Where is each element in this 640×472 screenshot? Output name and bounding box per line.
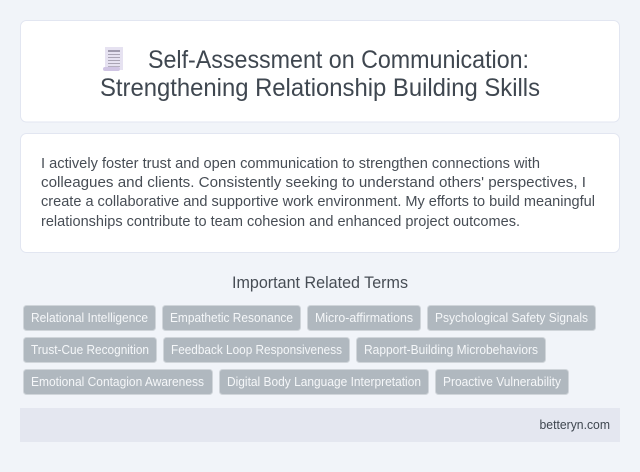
tag: Rapport-Building Microbehaviors <box>356 338 546 362</box>
summary paragraph: I actively foster trust and open communication to strengthen connections with <box>41 156 540 172</box>
footer site name: betteryn.com <box>540 418 610 432</box>
tag: Proactive Vulnerability: Proactive Vulnerability <box>443 375 562 389</box>
tag: Relational Intelligence: Relational Intelligence <box>31 311 148 325</box>
tag: Rapport-Building Microbehaviors: Rapport-Building Microbehaviors <box>364 343 538 357</box>
title <box>100 46 540 102</box>
panel: title card <box>20 20 620 122</box>
tag: Feedback Loop Responsiveness: Feedback Loop Responsiveness <box>171 343 342 357</box>
tag: Empathetic Resonance: Empathetic Resonance <box>170 311 293 325</box>
tag: Psychological Safety Signals <box>428 306 596 330</box>
tag: Empathetic Resonance <box>162 306 300 330</box>
tag: Micro-affirmations: Micro-affirmations <box>315 311 413 325</box>
title: Self-Assessment on Communication: <box>148 46 529 74</box>
panel: summary text <box>20 134 620 252</box>
tag: Digital Body Language Interpretation: Digital Body Language Interpretation <box>227 375 421 389</box>
footer bar <box>20 408 620 442</box>
summary paragraph <box>41 156 595 230</box>
heading: related terms: Important Related Terms <box>232 274 408 292</box>
tag: Psychological Safety Signals: Psychological Safety Signals <box>435 311 588 325</box>
summary paragraph: relationships contribute to team cohesion and enhanced project outcomes. <box>41 214 520 230</box>
tag: Micro-affirmations <box>308 306 420 330</box>
tag: Trust-Cue Recognition: Trust-Cue Recognition <box>31 343 149 357</box>
tag: Feedback Loop Responsiveness <box>164 338 350 362</box>
tag: Proactive Vulnerability <box>436 370 568 394</box>
tag list <box>24 306 596 394</box>
tag: Emotional Contagion Awareness: Emotional Contagion Awareness <box>31 375 204 389</box>
tag: Digital Body Language Interpretation <box>220 370 428 394</box>
icon: document scroll <box>103 47 123 71</box>
tag: Emotional Contagion Awareness <box>24 370 212 394</box>
tag: Relational Intelligence <box>24 306 156 330</box>
tag: Trust-Cue Recognition <box>24 338 156 362</box>
title: Strengthening Relationship Building Skills <box>100 74 540 102</box>
summary paragraph: colleagues and clients. Consistently seeking to understand others' perspectives, I <box>41 175 586 191</box>
summary paragraph: create a collaborative and supportive work environment. My efforts to build meaningful <box>41 194 595 210</box>
